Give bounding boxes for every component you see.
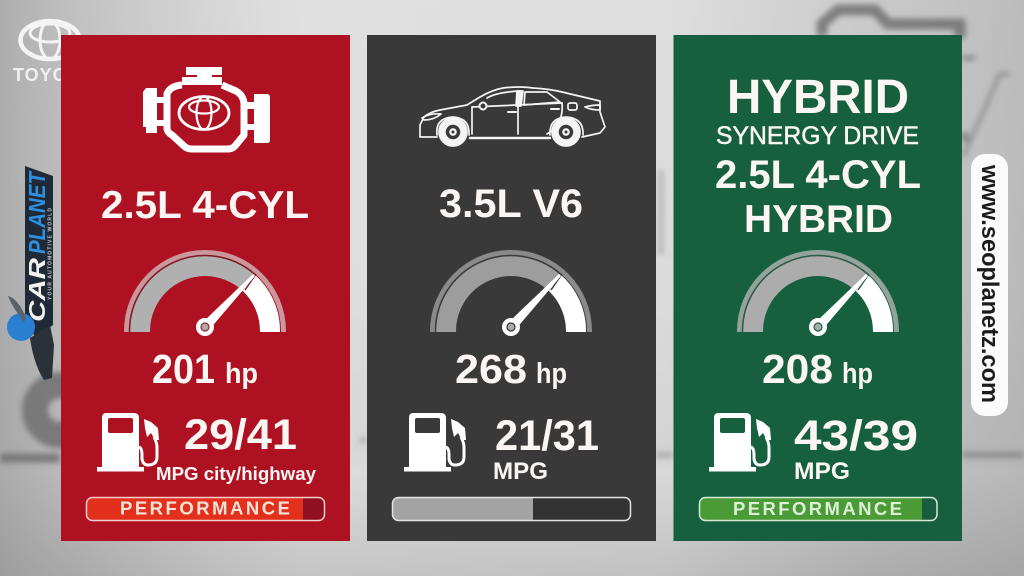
engine title: 2.5L 4-CYL [715, 153, 921, 197]
icon: fuel pump [404, 413, 466, 472]
engine title: 3.5L V6 [439, 182, 583, 226]
performance bar [700, 498, 937, 520]
website pill, vertical [971, 154, 1008, 416]
horsepower unit: hp [536, 358, 567, 390]
panel: 3.5L V6 [367, 35, 656, 541]
logo strip [25, 166, 53, 338]
website URL: www.seoplanetz.com [976, 164, 1003, 403]
MPG label: MPG city/highway [156, 464, 316, 484]
MPG label: MPG [794, 458, 850, 485]
panel background dark gray [367, 35, 656, 541]
horsepower value: 201 [152, 346, 215, 392]
panel: hybrid [674, 35, 962, 541]
performance bar [392, 498, 630, 520]
PLANET wordmark: PLANET [24, 170, 50, 254]
panel background red [61, 35, 350, 541]
MPG label: MPG [493, 458, 548, 485]
engine title second line: HYBRID [744, 198, 893, 241]
subheading Synergy Drive: SYNERGY DRIVE [716, 122, 919, 150]
icon: dark car silhouette [30, 325, 54, 380]
CAR wordmark: CAR [24, 258, 50, 322]
icon: Toyota emblem [20, 21, 80, 59]
gauge [430, 250, 592, 336]
Toyota wordmark: TOYOTA [13, 65, 92, 85]
Car Planet logo, rotated [7, 166, 54, 380]
horsepower unit: hp [225, 358, 258, 390]
performance bar: PERFORMANCE [120, 498, 290, 518]
MPG value: 21/31 [495, 412, 599, 460]
icon: fuel pump [709, 413, 771, 472]
gauge [737, 250, 899, 336]
icon: sedan car outline [420, 87, 605, 146]
horsepower value: 268 [455, 346, 527, 392]
heading HYBRID: HYBRID [727, 71, 909, 124]
icon: fuel pump [97, 413, 159, 472]
logo tagline: YOUR AUTOMOTIVE WORLD [48, 208, 54, 300]
engine title: 2.5L 4-CYL [101, 184, 309, 227]
performance bar [86, 498, 324, 520]
MPG value: 43/39 [794, 412, 918, 460]
panel: 2.5L 4-cyl [61, 35, 350, 541]
Toyota logo, top left [13, 21, 92, 85]
MPG value: 29/41 [184, 411, 297, 459]
performance bar: PERFORMANCE [733, 498, 902, 519]
pill background [971, 154, 1008, 416]
icon: engine with Toyota emblem [143, 67, 270, 149]
horsepower value: 208 [762, 346, 833, 392]
horsepower unit: hp [842, 358, 873, 390]
gauge [124, 250, 286, 336]
icon: globe [7, 313, 35, 341]
icon: swoosh over globe [8, 296, 26, 322]
panel background green [674, 35, 962, 541]
